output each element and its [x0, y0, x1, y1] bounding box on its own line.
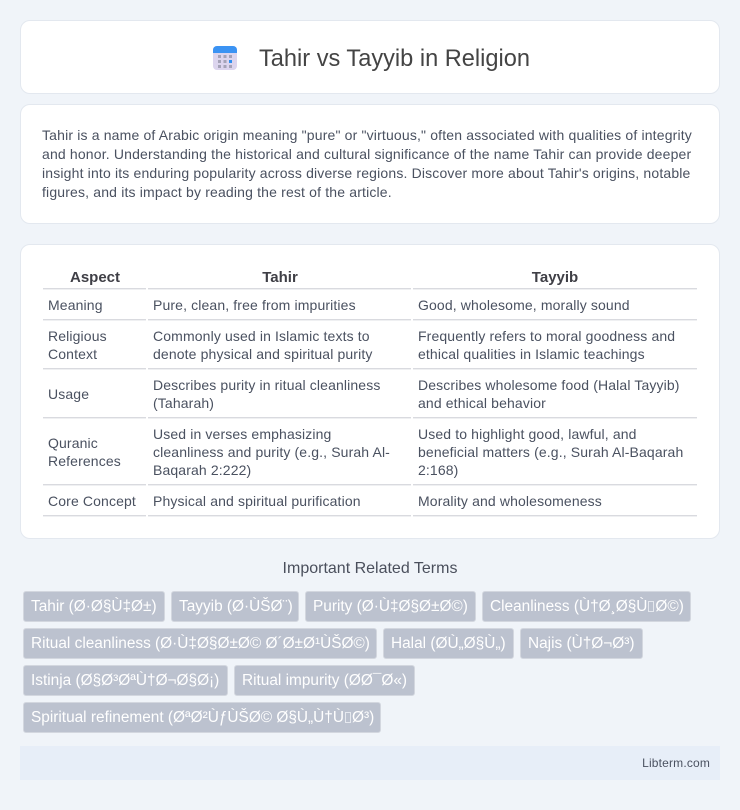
chip: Ritual impurity — [234, 665, 415, 696]
chip: Halal — [383, 628, 514, 659]
column heading: Aspect: Aspect — [70, 269, 120, 286]
Tayyib usage: and ethical behavior — [418, 395, 546, 411]
icon: calendar — [213, 46, 237, 70]
footer link text: Libterm.com — [642, 756, 710, 770]
row: Religious Context — [48, 328, 107, 362]
chip: Cleanliness — [482, 591, 691, 622]
row: Quranic References: Quranic — [48, 435, 98, 451]
row: Quranic References — [48, 435, 121, 469]
row: Usage: Usage — [48, 386, 89, 402]
Tahir context: Commonly used in Islamic texts to — [153, 328, 370, 344]
Tayyib references: beneficial matters (e.g., Surah Al-Baqarah — [418, 444, 683, 460]
chip: Spiritual refinement: Spiritual refinement (ØªØ²ÙƒÙŠØ© Ø§Ù„Ù†Ù Ø³) — [31, 709, 374, 726]
column heading: Tayyib: Tayyib — [532, 269, 578, 286]
row: Religious Context: Context — [48, 346, 97, 362]
chip: Purity — [305, 591, 476, 622]
title: Tahir vs Tayyib in Religion — [259, 46, 530, 72]
Tayyib meaning: Good, wholesome, morally sound — [418, 297, 630, 313]
chip: Tahir — [23, 591, 165, 622]
row: Quranic References: References — [48, 453, 121, 469]
chip: Najis: Najis (Ù†Ø¬Ø³) — [528, 635, 634, 652]
Tayyib context: ethical qualities in Islamic teachings — [418, 346, 645, 362]
intro paragraph: figures, and its impact by reading the rest of the article. — [42, 184, 392, 200]
column heading: Tahir: Tahir — [262, 269, 298, 286]
chip: Spiritual refinement — [23, 702, 381, 733]
intro paragraph: insight into its enduring popularity across diverse regions. Discover more about Tahir's origins, notable — [42, 165, 691, 181]
chip: Ritual cleanliness: Ritual cleanliness (Ø·Ù‡Ø§Ø±Ø© Ø´Ø±Ø¹ÙŠØ©) — [31, 635, 370, 652]
Tahir core concept: Physical and spiritual purification — [153, 493, 361, 509]
Tahir context: denote physical and spiritual purity — [153, 346, 372, 362]
chip: Tayyib — [171, 591, 299, 622]
Tahir usage — [153, 377, 380, 411]
Tayyib context — [418, 328, 675, 362]
chip: Najis — [520, 628, 643, 659]
Tayyib core concept: Morality and wholesomeness — [418, 493, 602, 509]
Tayyib context: Frequently refers to moral goodness and — [418, 328, 675, 344]
Tahir meaning: Pure, clean, free from impurities — [153, 297, 356, 313]
related terms chips — [23, 591, 691, 733]
Tahir references: cleanliness and purity (e.g., Surah Al- — [153, 444, 390, 460]
chip: Istinja: Istinja (Ø§Ø³ØªÙ†Ø¬Ø§Ø¡) — [31, 672, 219, 689]
Tayyib usage: Describes wholesome food (Halal Tayyib) — [418, 377, 680, 393]
footer bar — [20, 746, 720, 780]
chip: Purity: Purity (Ø·Ù‡Ø§Ø±Ø©) — [313, 598, 468, 615]
Tahir references: Used in verses emphasizing — [153, 426, 331, 442]
Tayyib references — [418, 426, 683, 478]
Tayyib references: Used to highlight good, lawful, and — [418, 426, 637, 442]
Tahir usage: (Taharah) — [153, 395, 214, 411]
chip: Cleanliness: Cleanliness (Ù†Ø¸Ø§Ù Ø©) — [490, 598, 684, 615]
Tahir references: Baqarah 2:222) — [153, 462, 251, 478]
chip: Halal: Halal (Ø­Ù„Ø§Ù„) — [391, 635, 506, 652]
chip: Istinja — [23, 665, 228, 696]
intro paragraph: and honor. Understanding the historical and cultural significance of the name Tahir can provide deeper — [42, 146, 691, 162]
chip: Ritual impurity: Ritual impurity (Ø­Ø¯Ø«) — [242, 672, 407, 689]
chip: Tahir: Tahir (Ø·Ø§Ù‡Ø±) — [31, 598, 157, 615]
Tahir usage: Describes purity in ritual cleanliness — [153, 377, 380, 393]
chip: Tayyib: Tayyib (Ø·ÙŠØ¨) — [179, 598, 293, 615]
comparison table card — [20, 244, 720, 539]
header card — [20, 20, 720, 94]
row: Religious Context: Religious — [48, 328, 107, 344]
Tayyib usage — [418, 377, 680, 411]
related terms heading: Important Related Terms — [283, 560, 457, 577]
intro paragraph — [42, 127, 692, 200]
row: Core Concept: Core Concept — [48, 493, 136, 509]
Tahir references — [153, 426, 390, 478]
Tahir context — [153, 328, 372, 362]
intro text card — [20, 104, 720, 224]
chip: Ritual cleanliness — [23, 628, 377, 659]
intro paragraph: Tahir is a name of Arabic origin meaning "pure" or "virtuous," often associated with qualities of integrity — [42, 127, 692, 143]
Tayyib references: 2:168) — [418, 462, 458, 478]
row: Meaning: Meaning — [48, 297, 103, 313]
